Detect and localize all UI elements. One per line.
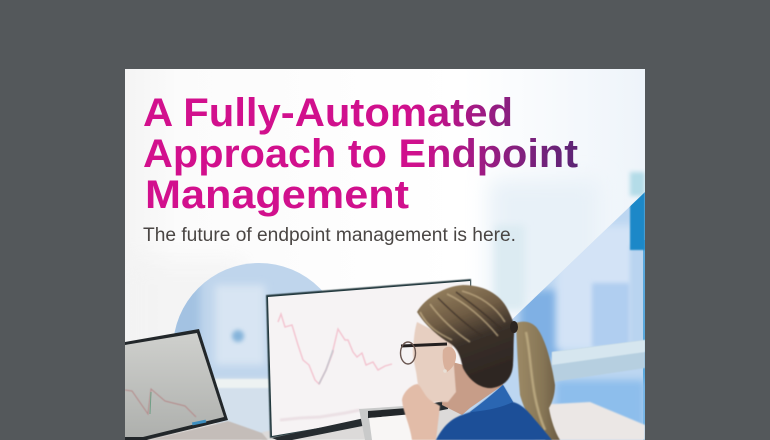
earring [443,369,447,373]
subtitle: The future of endpoint management is here. [143,225,516,246]
desk under monitor [262,408,460,440]
hair shadow strands [437,291,496,332]
hair highlights [420,291,505,342]
ear [443,347,456,372]
icon: tablet [359,404,435,440]
circle: blue city photo [174,263,322,434]
chart line [278,314,392,384]
ponytail [516,322,560,440]
infographic cover [125,69,645,440]
head hair [417,285,515,388]
desk [535,402,645,440]
blue shirt [436,385,552,440]
icon: glasses [400,342,447,364]
title line 1: A Fully-Automated [143,91,513,135]
triangle: blue window panel [435,192,645,440]
hair tie [510,321,518,333]
title line 2: Approach to Endpoint [143,132,578,176]
icon: laptop [125,329,268,440]
hand [402,384,440,440]
title [143,91,578,217]
figure: woman with ponytail [400,285,560,440]
title line 3: Management [145,173,409,217]
panel: photo card [125,69,645,440]
neck [442,360,503,415]
photo background [125,69,645,440]
face [413,322,456,402]
icon: desktop monitor [266,279,471,440]
